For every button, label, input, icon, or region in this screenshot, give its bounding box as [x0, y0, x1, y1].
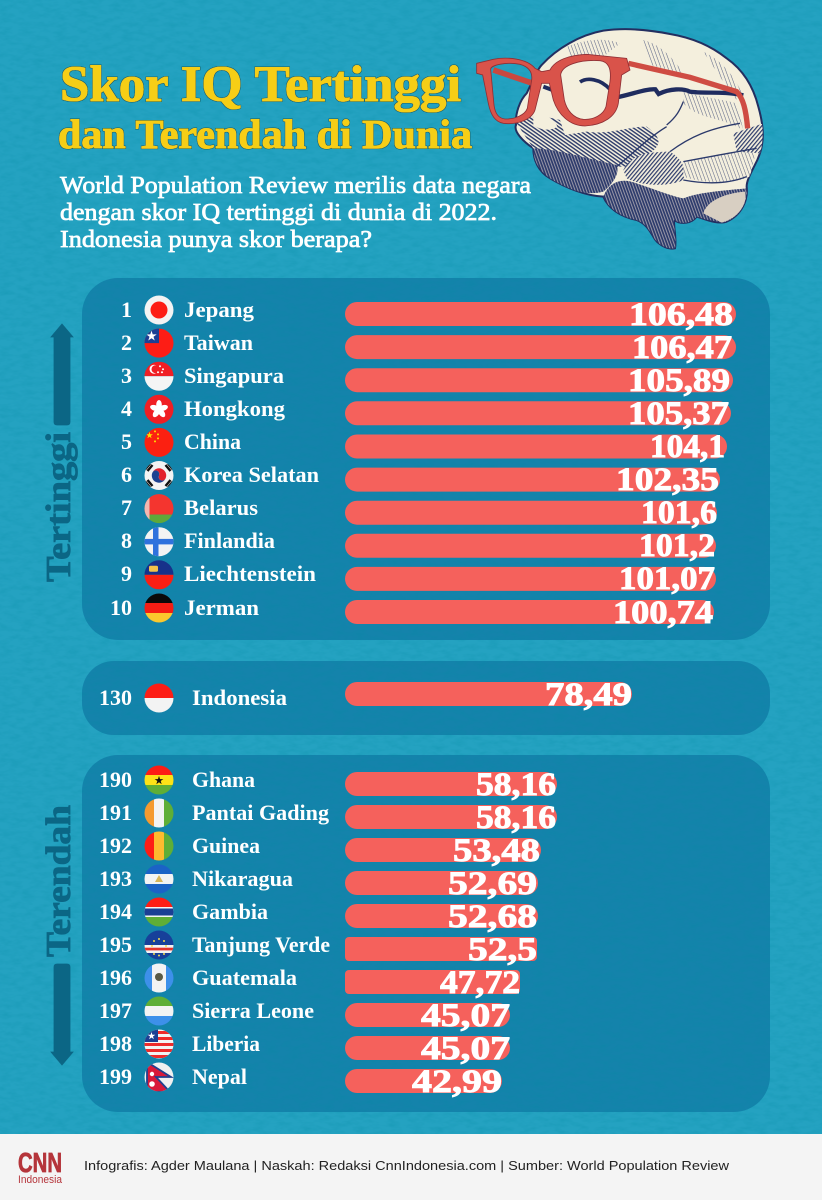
row 194 Gambia: 194 — [99, 899, 132, 924]
row 3 Singapura: 105,89 — [628, 363, 730, 399]
row 4 Hongkong — [121, 394, 731, 432]
row 7 Belarus: 101,6 — [641, 495, 717, 531]
title — [58, 57, 472, 157]
row 1 Jepang — [121, 295, 736, 333]
row 198 Liberia: 198 — [99, 1031, 132, 1056]
row 198 Liberia: Liberia — [192, 1031, 260, 1056]
row 5 China: 104,1 — [650, 429, 725, 465]
row 6 Korea Selatan — [121, 460, 720, 498]
row 8 Finlandia: 101,2 — [639, 528, 715, 564]
logo: CNN Indonesia: CNN — [18, 1147, 62, 1178]
row 194 Gambia — [99, 897, 538, 935]
row 10 Jerman — [110, 593, 714, 631]
row 130 Indonesia: 78,49 — [545, 677, 632, 713]
panel: terendah background — [82, 755, 770, 1112]
row 199 Nepal: Nepal — [192, 1064, 247, 1089]
row 3 Singapura: Singapura — [184, 363, 284, 388]
row 192 Guinea: 53,48 — [453, 833, 540, 869]
row 195 Tanjung Verde: 52,5 — [468, 932, 537, 968]
credits: Infografis: Agder Maulana | Naskah: Redaksi CnnIndonesia.com | Sumber: World Population Review — [84, 1158, 730, 1173]
row 10 Jerman: 100,74 — [613, 595, 713, 631]
row 194 Gambia: 52,68 — [448, 899, 537, 935]
title: dan Terendah di Dunia — [58, 111, 472, 157]
row 6 Korea Selatan: Korea Selatan — [184, 462, 319, 487]
row 190 Ghana: Ghana — [192, 767, 255, 792]
row 8 Finlandia — [121, 527, 716, 564]
row 190 Ghana: 190 — [99, 767, 132, 792]
row 8 Finlandia: Finlandia — [184, 528, 275, 553]
row 190 Ghana: 58,16 — [476, 767, 556, 803]
row 7 Belarus — [121, 494, 717, 531]
row 9 Liechtenstein: Liechtenstein — [184, 561, 316, 586]
panel: tertinggi background — [82, 278, 770, 640]
logo: CNN Indonesia — [18, 1147, 63, 1186]
glasses — [477, 54, 748, 128]
row 4 Hongkong: 105,37 — [628, 396, 729, 432]
intro text — [60, 173, 531, 253]
row 3 Singapura: 3 — [121, 363, 132, 388]
row 193 Nikaragua — [99, 864, 538, 902]
row 197 Sierra Leone: 45,07 — [421, 998, 510, 1034]
row 196 Guatemala — [99, 963, 520, 1001]
row 197 Sierra Leone: 197 — [99, 998, 132, 1023]
row 199 Nepal: 42,99 — [412, 1064, 502, 1100]
row 3 Singapura — [121, 361, 733, 399]
row 2 Taiwan: 106,47 — [632, 330, 732, 366]
row 6 Korea Selatan: 102,35 — [616, 462, 719, 498]
intro text: Indonesia punya skor berapa? — [60, 227, 372, 253]
row 194 Gambia: Gambia — [192, 899, 268, 924]
row 2 Taiwan — [121, 328, 736, 366]
row 2 Taiwan: 2 — [121, 330, 132, 355]
row 10 Jerman: 10 — [110, 595, 132, 620]
title: Skor IQ Tertinggi — [60, 57, 461, 113]
row 2 Taiwan: Taiwan — [184, 330, 253, 355]
row 192 Guinea: Guinea — [192, 833, 260, 858]
side label: Terendah with down arrow — [39, 805, 78, 1065]
side label: Tertinggi with up arrow — [39, 324, 78, 582]
row 7 Belarus: 7 — [121, 495, 132, 520]
row 193 Nikaragua: Nikaragua — [192, 866, 293, 891]
row 4 Hongkong: Hongkong — [184, 396, 285, 421]
row 192 Guinea: 192 — [99, 833, 132, 858]
row 198 Liberia: 45,07 — [421, 1031, 510, 1067]
row 6 Korea Selatan: 6 — [121, 462, 132, 487]
row 196 Guatemala: Guatemala — [192, 965, 297, 990]
row 192 Guinea — [99, 831, 541, 869]
row 1 Jepang: 1 — [121, 297, 132, 322]
side label: Terendah with down arrow: Terendah — [39, 805, 78, 957]
row 195 Tanjung Verde: 195 — [99, 932, 132, 957]
row 10 Jerman: Jerman — [184, 595, 259, 620]
row 191 Pantai Gading: 58,16 — [476, 800, 556, 836]
illustration: brain with red glasses — [477, 29, 763, 250]
row 197 Sierra Leone: Sierra Leone — [192, 998, 314, 1023]
side label: Tertinggi with up arrow: Tertinggi — [39, 432, 78, 582]
row 7 Belarus: Belarus — [184, 495, 258, 520]
row 130 Indonesia: Indonesia — [192, 685, 287, 710]
footer — [0, 1134, 822, 1200]
row 9 Liechtenstein: 9 — [121, 561, 132, 586]
row 193 Nikaragua: 193 — [99, 866, 132, 891]
row 130 Indonesia: 130 — [99, 685, 132, 710]
panel: indonesia background — [82, 661, 770, 735]
row 195 Tanjung Verde: Tanjung Verde — [192, 932, 330, 957]
row 197 Sierra Leone — [99, 996, 510, 1034]
logo: CNN Indonesia: Indonesia — [18, 1174, 63, 1186]
row 1 Jepang: 106,48 — [629, 297, 733, 333]
row 196 Guatemala: 47,72 — [440, 965, 520, 1001]
intro text: World Population Review merilis data negara — [60, 173, 531, 199]
row 191 Pantai Gading — [99, 798, 557, 836]
row 199 Nepal: 199 — [99, 1064, 132, 1089]
row 191 Pantai Gading: 191 — [99, 800, 132, 825]
row 190 Ghana — [99, 765, 557, 803]
row 5 China — [121, 427, 727, 465]
row 1 Jepang: Jepang — [184, 297, 254, 322]
row 193 Nikaragua: 52,69 — [448, 866, 537, 902]
row 130 Indonesia — [100, 682, 632, 712]
row 4 Hongkong: 4 — [121, 396, 132, 421]
row 191 Pantai Gading: Pantai Gading — [192, 800, 329, 825]
row 8 Finlandia: 8 — [121, 528, 132, 553]
row 198 Liberia — [99, 1029, 510, 1067]
row 196 Guatemala: 196 — [99, 965, 132, 990]
intro text: dengan skor IQ tertinggi di dunia di 2022. — [60, 200, 497, 226]
row 9 Liechtenstein — [121, 560, 716, 597]
row 9 Liechtenstein: 101,07 — [619, 561, 715, 597]
row 195 Tanjung Verde — [99, 930, 537, 968]
row 5 China: China — [184, 429, 241, 454]
row 199 Nepal — [99, 1062, 502, 1100]
row 5 China: 5 — [121, 429, 132, 454]
